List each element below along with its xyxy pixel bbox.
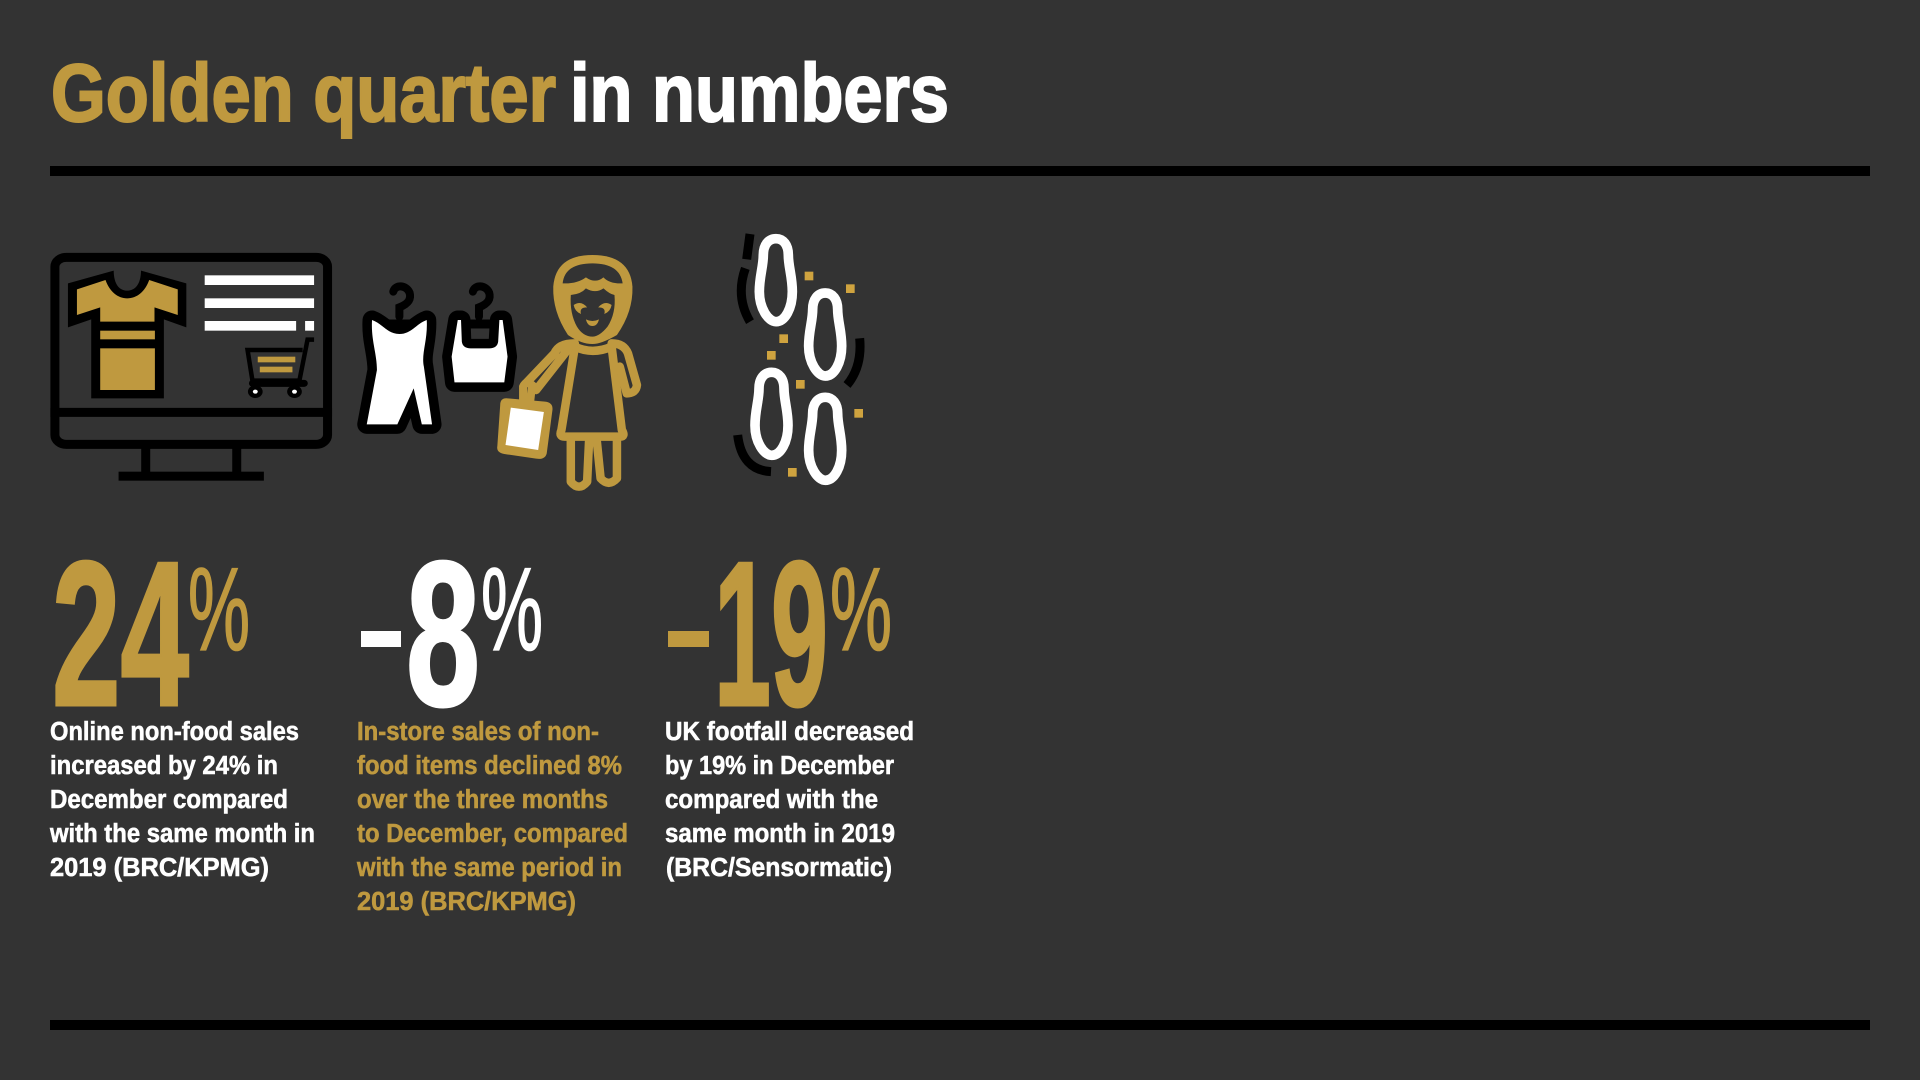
text: in-store sales description: 2019 (BRC/KPMG)	[357, 888, 576, 916]
text: in-store sales description	[356, 718, 628, 916]
stat: 24% online: 24	[52, 519, 189, 749]
stat: -8% in-store	[361, 519, 543, 749]
text: online sales description: with the same month in	[49, 820, 315, 848]
text: footfall description: UK footfall decreased	[665, 718, 914, 746]
text: in-store sales description: over the three months	[357, 786, 608, 814]
text: online sales description: December compared	[50, 786, 288, 814]
text: footfall description: same month in 2019	[665, 820, 895, 848]
text: footfall description: by 19% in December	[665, 752, 894, 780]
stat: -8% in-store: 8	[406, 519, 480, 749]
stat: 24% online: %	[188, 544, 250, 676]
text: online sales description: Online non-food sales	[50, 718, 299, 746]
title	[51, 48, 949, 139]
icon: clothes on hangers	[367, 286, 508, 424]
stat: -19% footfall: 19	[714, 519, 828, 749]
text: in-store sales description: In-store sales of non-	[357, 718, 599, 746]
title: Golden quarter	[51, 48, 556, 139]
text: in-store sales description: food items declined 8%	[357, 752, 622, 780]
text: online sales description: increased by 24% in	[50, 752, 278, 780]
stat: -19% footfall: %	[830, 544, 892, 676]
icon: computer monitor with shirt and shopping cart	[50, 257, 332, 481]
text: footfall description: (BRC/Sensormatic)	[666, 854, 892, 882]
text: online sales description	[49, 718, 315, 882]
stat: -19% footfall	[668, 519, 892, 749]
icon: woman with shopping bag	[497, 255, 637, 487]
text: footfall description	[665, 718, 914, 882]
title: in numbers	[570, 48, 949, 139]
text: footfall description: compared with the	[665, 786, 878, 814]
icon: footprints	[738, 234, 863, 480]
text: online sales description: 2019 (BRC/KPMG)	[50, 854, 269, 882]
text: in-store sales description: with the same period in	[356, 854, 622, 882]
text: in-store sales description: to December, compared	[357, 820, 628, 848]
stat: -8% in-store: %	[481, 544, 543, 676]
